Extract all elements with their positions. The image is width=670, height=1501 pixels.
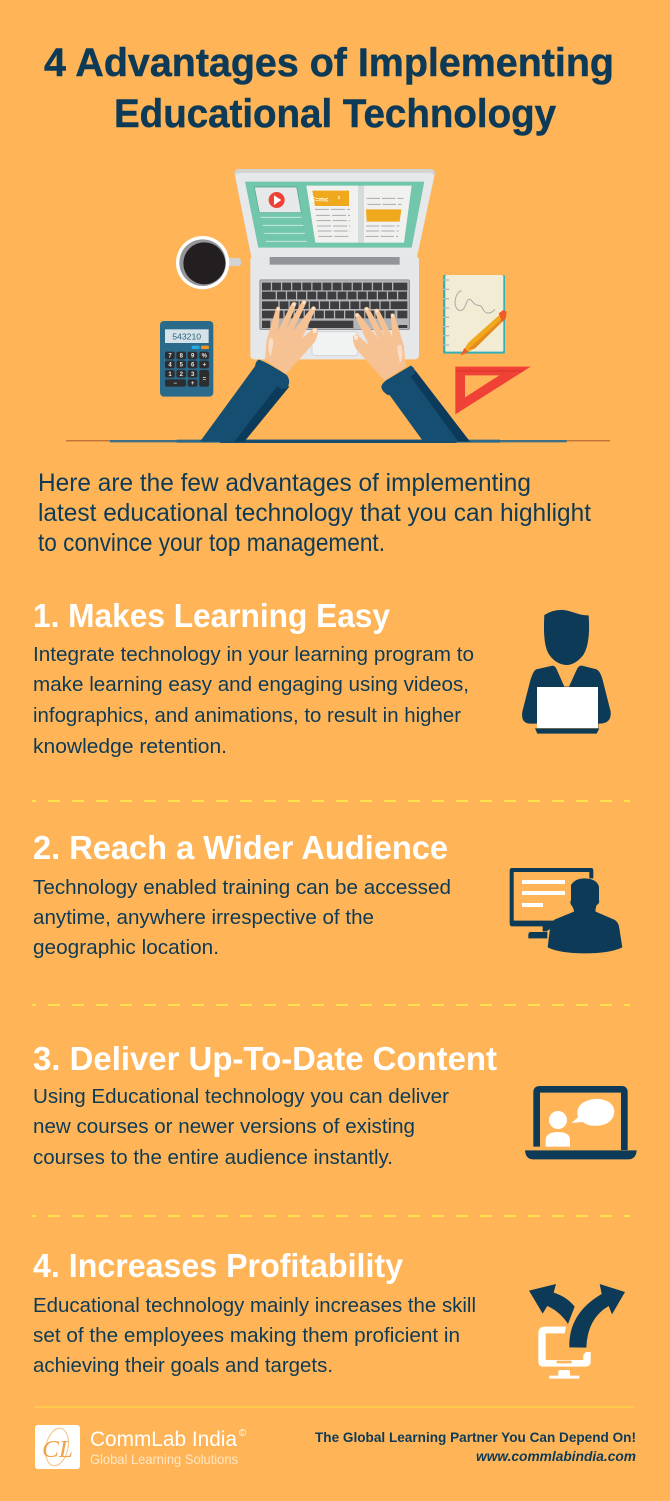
footer: logo [35,1425,247,1469]
laptop lid: E=mc [311,197,329,204]
intro text: to convince your top management. [38,529,385,557]
body 3: courses to the entire audience instantly. [33,1146,393,1169]
title [44,41,614,136]
footer: logo: Global Learning Solutions [90,1451,238,1467]
body 2: geographic location. [33,936,219,959]
icon: laptop with speaker [525,1086,637,1159]
icon: calculator: 8 [180,354,184,360]
icon: coffee cup [176,236,241,289]
heading 3: 3. Deliver Up-To-Date Content [33,1040,497,1077]
icon: calculator: + [191,381,195,387]
icon: calculator: + [203,363,207,369]
icon: calculator: = [203,377,207,383]
logo wordmark: CommLab India [90,1428,237,1451]
logo badge [35,1425,80,1469]
heading 4: 4. Increases Profitability [33,1247,404,1284]
body 3 [33,1085,449,1169]
icon: calculator: % [202,354,208,360]
section 4: Increases Profitability [33,1247,625,1379]
icon: calculator: − [174,381,178,387]
body 2: anytime, anywhere irrespective of the [33,906,374,929]
icon: calculator: 9 [191,354,195,360]
body 4 [33,1294,476,1377]
divider [32,1215,630,1217]
body 3: Using Educational technology you can deliver [33,1085,449,1108]
body 4: set of the employees making them proficient in [33,1324,460,1347]
body 1: knowledge retention. [33,735,227,758]
icon: calculator: 4 [168,363,172,369]
footer: tagline: The Global Learning Partner You Can Depend On! [315,1429,636,1445]
icon: calculator: 6 [191,363,195,369]
body 1: make learning easy and engaging using videos, [33,673,469,696]
icon: calculator: 7 [168,354,172,360]
icon: calculator: 543210 [172,331,201,341]
footer: logo: © [239,1428,247,1439]
laptop lid: 2 [338,195,341,200]
divider [32,800,630,802]
icon: diverging arrows and monitor [529,1284,625,1379]
illustration: laptop on desk [66,169,610,443]
title: 4 Advantages of Implementing [44,41,614,85]
footer: tagline [315,1429,636,1464]
icon: notebook and pencil [443,275,507,355]
footer rule [35,1406,634,1408]
right arm and hand [353,307,470,442]
body 3: new courses or newer versions of existing [33,1115,415,1138]
left arm and hand [200,300,318,442]
section 1: Makes Learning Easy [33,597,611,758]
icon: set square ruler [455,367,531,414]
title: Educational Technology [114,92,557,136]
icon: calculator [160,321,213,397]
icon: person at monitor [510,868,622,953]
icon: calculator: 2 [180,372,184,378]
icon: calculator: 3 [191,372,195,378]
intro text [38,469,591,557]
body 4: achieving their goals and targets. [33,1354,333,1377]
body 1 [33,643,474,758]
body 2 [33,876,451,959]
laptop lid [234,169,435,258]
logo badge: CL [42,1437,73,1463]
icon: calculator: 5 [180,363,184,369]
body 1: infographics, and animations, to result in higher [33,704,461,727]
laptop base [250,256,419,359]
body 2: Technology enabled training can be accessed [33,876,451,899]
section 2: Reach a Wider Audience [33,829,622,959]
icon: person with laptop [522,610,611,734]
divider [32,1004,630,1006]
body 4: Educational technology mainly increases the skill [33,1294,476,1317]
icon: calculator: 1 [168,372,172,378]
heading 1: 1. Makes Learning Easy [33,597,391,634]
intro text: latest educational technology that you can highlight [38,499,591,527]
intro text: Here are the few advantages of implementing [38,469,531,497]
section 3: Deliver Up-To-Date Content [33,1040,637,1169]
desk line [66,440,610,443]
body 1: Integrate technology in your learning program to [33,643,474,666]
heading 2: 2. Reach a Wider Audience [33,829,448,866]
footer: tagline: www.commlabindia.com [476,1448,636,1464]
